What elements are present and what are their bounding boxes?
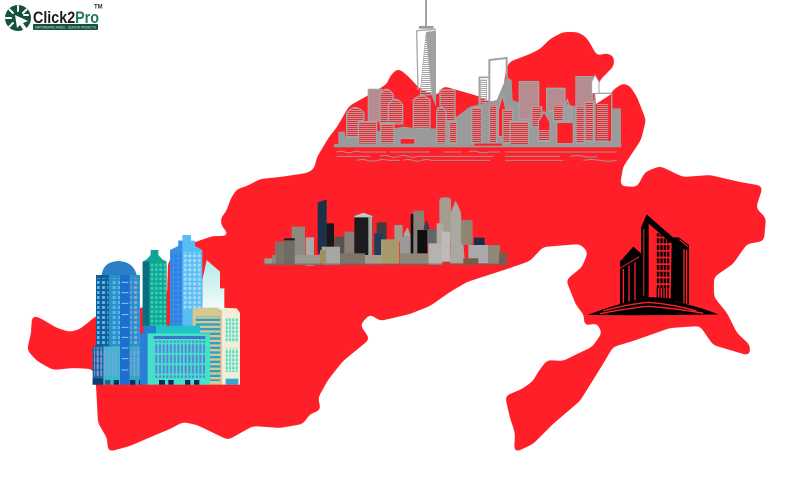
curved plinth [587, 297, 718, 315]
colourful blue and teal buildings [93, 235, 240, 385]
pale glass tower [202, 260, 224, 310]
wide mint building [140, 326, 210, 385]
one world trade tower [417, 0, 436, 107]
left block [619, 247, 641, 305]
black office building icon [587, 214, 718, 315]
map of Arunachal Pradesh region [27, 32, 766, 453]
light blue tower [170, 235, 202, 328]
central blue column [120, 275, 129, 385]
cream building [220, 308, 240, 385]
right block [673, 237, 689, 304]
solid skyline base mass [334, 77, 621, 146]
central tower [641, 214, 674, 302]
trademark mark: TM [94, 4, 103, 10]
logo badge with cursor [5, 5, 31, 31]
dark blue tower [96, 261, 140, 352]
teal tower [143, 250, 167, 327]
logo: Click2Pro [5, 4, 103, 31]
photographic grey city skyline [263, 197, 509, 266]
water ripples [337, 151, 617, 161]
beige building [193, 308, 222, 385]
low left block [93, 346, 146, 385]
neighbouring outlined towers [479, 58, 507, 110]
logo tagline bar: EMPOWERING ANGEL · SEASON PROJECTS [35, 26, 96, 30]
waterfront base line [334, 144, 621, 147]
grey line-art skyline [334, 0, 621, 161]
logo wordmark: Click2Pro [33, 8, 99, 27]
building faces [347, 75, 612, 145]
